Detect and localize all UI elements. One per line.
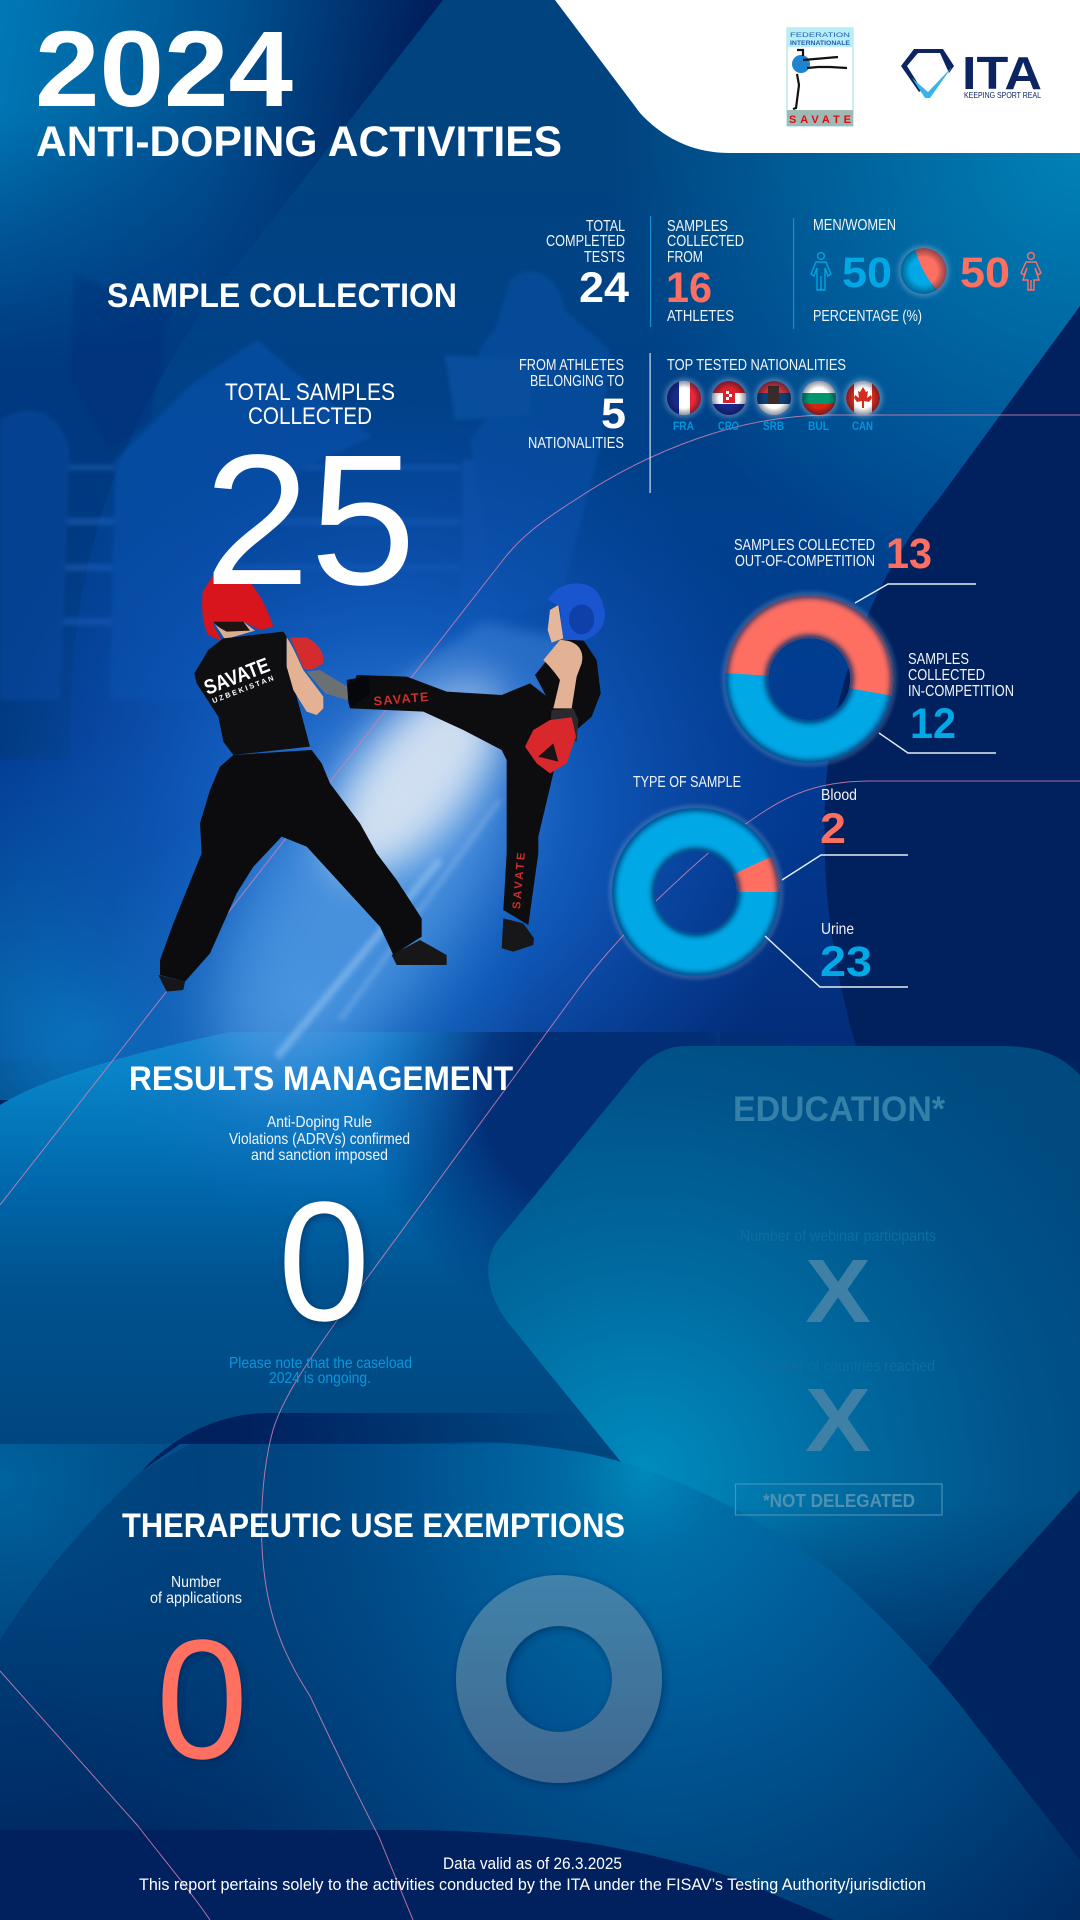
callout: blood [782,787,908,880]
logo: ITA: ITA [962,47,1042,99]
stat: samples collected from athletes: ATHLETES [667,308,734,325]
callout: blood: Blood [821,787,857,804]
stat: men and women percentage: 50 [842,249,892,297]
stat: nationalities: 5 [601,390,626,438]
panel: therapeutic use exemptions: Number [171,1574,222,1591]
stat: total completed tests [546,218,629,312]
stat: samples collected from athletes: 16 [666,264,712,312]
stat: total completed tests: TESTS [584,249,625,266]
donut: empty [456,1575,662,1783]
flag: Bulgaria [800,379,838,417]
stat: total completed tests: TOTAL [586,218,625,235]
panel: results management: 0 [278,1167,370,1357]
decorative pink curves [0,415,1080,1920]
callout: urine: 23 [820,938,872,986]
logo: FISAV: SAVATE [789,114,851,126]
icon: male [811,253,831,290]
footer note [139,1854,926,1894]
callout: out-of-competition: OUT-OF-COMPETITION [735,553,875,570]
donut: type of sample [606,774,908,987]
callout: out-of-competition: SAMPLES COLLECTED [734,537,875,554]
fighter: right, blue helmet: SAVATE [511,852,528,910]
panel: education: Number of countries reached [754,1358,935,1375]
flag labels: BUL [808,419,829,433]
panel: therapeutic use exemptions [122,1507,662,1795]
fighter: right, blue helmet [307,583,605,952]
panel: results management [129,1060,513,1387]
footer note: Data valid as of 26.3.2025 [443,1854,622,1873]
total samples collected: 25 [204,417,416,624]
callout: urine [765,921,908,987]
flag labels: FRA [673,419,694,433]
panel: results management: RESULTS MANAGEMENT [129,1060,513,1098]
logo: FISAV: FEDERATION [790,32,850,39]
panel: education: X [805,1371,871,1471]
fighter: left, red helmet: SAVATE [201,654,273,700]
flag labels: SRB [763,419,784,433]
stat: nationalities: FROM ATHLETES [519,357,624,374]
flag labels: CAN [852,419,873,433]
fighter: right, blue helmet: SAVATE [373,690,429,709]
footer note: This report pertains solely to the activities conducted by the ITA under the FISAV’s Testing Authority/jurisdiction [139,1875,926,1894]
stat: nationalities: NATIONALITIES [528,435,624,452]
donut: in and out of competition [720,530,1014,770]
logo: FISAV: INTERNATIONALE [790,40,851,47]
total samples collected: COLLECTED [248,403,372,430]
flag: Serbia [755,379,793,417]
panel: therapeutic use exemptions: of applications [150,1590,242,1607]
title: 2024 [35,8,293,129]
stat: samples collected from athletes: FROM [667,249,703,266]
title: ANTI-DOPING ACTIVITIES [36,118,562,166]
stat: men and women percentage: 50 [960,249,1010,297]
panel: therapeutic use exemptions: THERAPEUTIC USE EXEMPTIONS [122,1507,625,1545]
stat: samples collected from athletes: COLLECTED [667,233,744,250]
stat: men and women percentage: PERCENTAGE (%) [813,308,922,325]
donut: type of sample: TYPE OF SAMPLE [633,774,741,791]
stat: men and women percentage [811,217,1041,325]
callout: blood: 2 [820,805,846,853]
top tested nationalities: TOP TESTED NATIONALITIES [667,357,846,374]
pie: men and women [899,246,950,296]
heading: sample collection: SAMPLE COLLECTION [107,277,457,315]
callout: in-competition: COLLECTED [908,667,985,684]
light beam [161,622,570,1125]
fighter: left, red helmet [158,575,447,992]
panel: education: Number of webinar participants [740,1228,936,1245]
callout: in-competition: SAMPLES [908,651,969,668]
panel: results management: Violations (ADRVs) confirmed [229,1131,410,1148]
stat: men and women percentage: MEN/WOMEN [813,217,896,234]
icon: female [1021,253,1041,290]
callout: out-of-competition: 13 [886,530,932,578]
flag: Canada [844,379,882,417]
flag labels [673,419,873,433]
panel: results management: Please note that the caseload [229,1355,412,1372]
stat: total completed tests: COMPLETED [546,233,625,250]
fighter: left, red helmet: UZBEKISTAN [211,674,275,705]
callout: in-competition [879,651,1014,753]
white logo panel [555,0,1080,153]
flag: France [665,379,703,417]
callout: out-of-competition [734,530,976,603]
title [35,8,562,166]
logo: ITA [901,47,1042,100]
panel: therapeutic use exemptions: 0 [156,1605,248,1795]
callout: urine: Urine [821,921,854,938]
panel: education: *NOT DELEGATED [763,1491,915,1511]
callout: in-competition: IN-COMPETITION [908,683,1014,700]
stat: nationalities [519,357,626,452]
panel: results management: 2024 is ongoing. [269,1370,371,1387]
top tested nationalities [665,357,882,433]
stat: samples collected from athletes: SAMPLES [667,218,728,235]
panel: education: EDUCATION* [733,1090,945,1129]
stat: nationalities: BELONGING TO [530,373,624,390]
flag: Croatia [710,379,748,417]
panel: education [733,1090,945,1515]
fighters [158,575,605,992]
panel: results management: and sanction imposed [251,1147,388,1164]
stat: total completed tests: 24 [579,264,629,312]
stat: samples collected from athletes [666,218,744,325]
flag labels: CRO [718,419,739,433]
total samples collected: TOTAL SAMPLES [225,379,395,406]
logo: ITA: KEEPING SPORT REAL [964,91,1041,100]
panel: education: X [805,1242,871,1342]
callout: in-competition: 12 [910,700,956,748]
logo: FISAV [787,28,853,126]
panel: results management: Anti-Doping Rule [267,1114,372,1131]
